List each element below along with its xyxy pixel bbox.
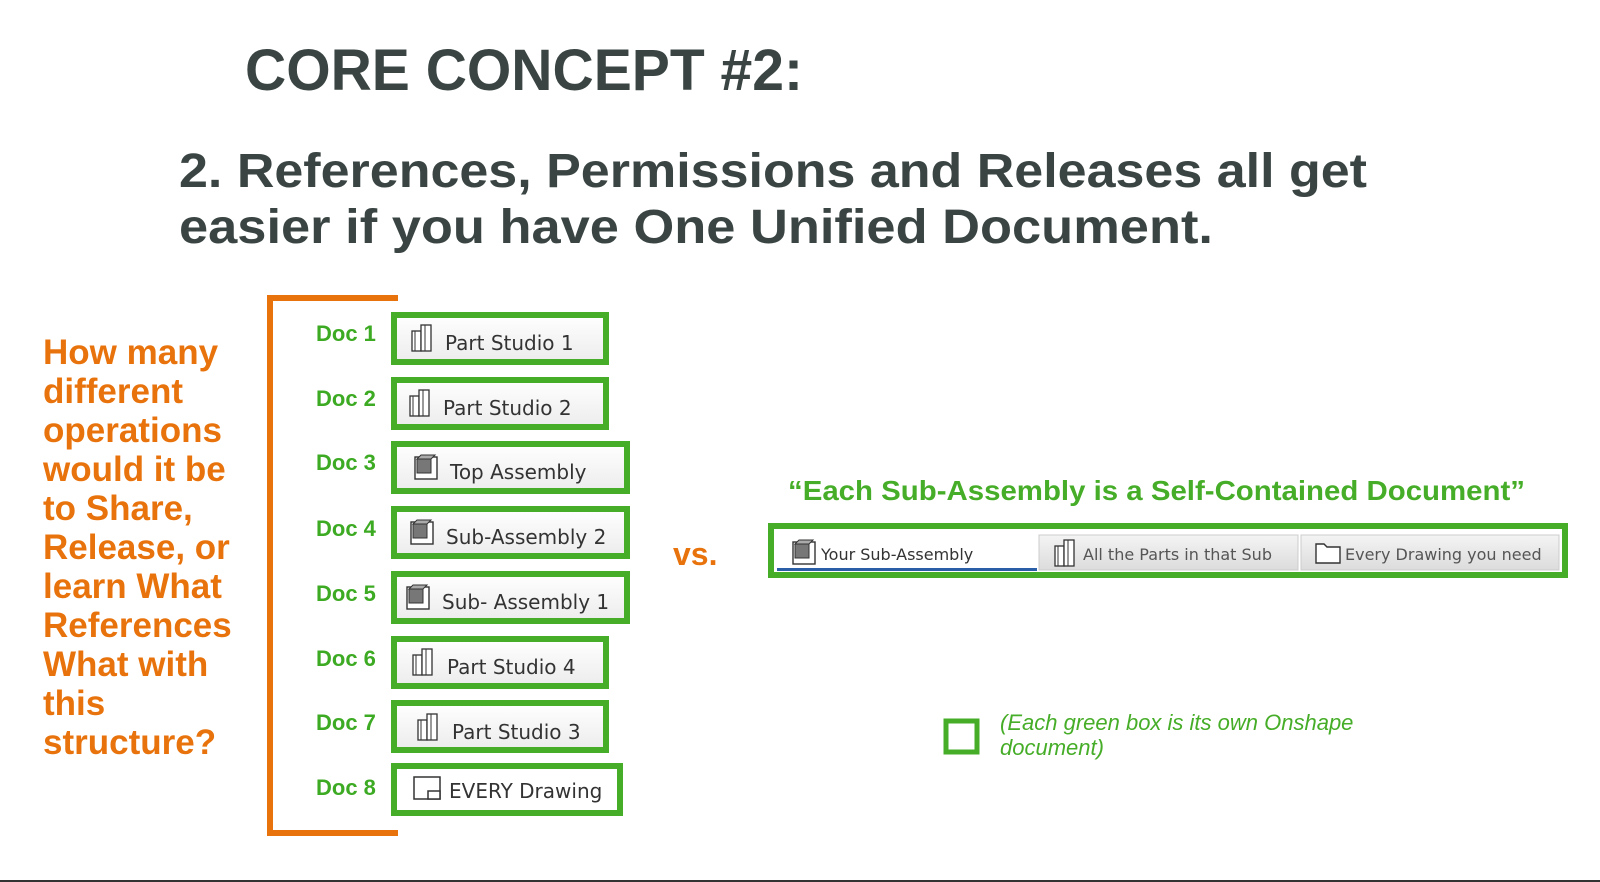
question text: to Share, [43, 489, 193, 528]
question text: structure? [43, 723, 216, 762]
legend: document) [1000, 735, 1104, 760]
doc 6 box: Part Studio 4 [447, 655, 576, 679]
doc labels: Doc 3 [316, 450, 376, 475]
title: CORE CONCEPT #2: [245, 38, 803, 103]
bracket [270, 298, 398, 833]
question text: What with [43, 645, 208, 684]
doc labels: Doc 8 [316, 775, 376, 800]
question text: How many [43, 333, 219, 372]
question text: different [43, 372, 183, 411]
doc 7 box: Part Studio 3 [452, 720, 581, 744]
doc 5 box: Sub- Assembly 1 [442, 590, 609, 614]
doc 5 box [394, 574, 627, 621]
subtitle: 2. References, Permissions and Releases all get [179, 145, 1367, 198]
vs label: vs. [673, 536, 717, 572]
question text: learn What [43, 567, 222, 606]
subtitle [179, 145, 1367, 254]
tab: drawings: Every Drawing you need [1345, 545, 1542, 564]
doc 8 box [394, 766, 620, 813]
doc 3 box [394, 444, 627, 491]
question text: would it be [42, 450, 226, 489]
question text: operations [43, 411, 222, 450]
tab: parts: All the Parts in that Sub [1083, 545, 1272, 564]
doc 8 box: EVERY Drawing [449, 779, 602, 803]
tab: your sub-assembly: Your Sub-Assembly [820, 545, 973, 564]
doc labels: Doc 5 [316, 581, 376, 606]
doc labels: Doc 4 [316, 516, 377, 541]
doc 6 box [394, 639, 606, 686]
tab: your sub-assembly [777, 535, 1037, 571]
document boxes [394, 315, 627, 813]
legend [946, 710, 1353, 760]
doc 2 box [394, 380, 606, 427]
quote heading: “Each Sub-Assembly is a Self-Contained Document” [788, 475, 1525, 506]
doc labels [316, 321, 377, 800]
doc 1 box: Part Studio 1 [445, 331, 574, 355]
doc 4 box: Sub-Assembly 2 [446, 525, 606, 549]
question text: this [43, 684, 105, 723]
doc labels: Doc 6 [316, 646, 376, 671]
doc 4 box [394, 509, 627, 556]
tab: drawings [1301, 535, 1559, 570]
subtitle: easier if you have One Unified Document. [179, 201, 1213, 254]
doc 7 box [394, 703, 606, 750]
tab: parts [1039, 535, 1298, 570]
question text: Release, or [43, 528, 230, 567]
doc 3 box: Top Assembly [449, 460, 587, 484]
doc 2 box: Part Studio 2 [443, 396, 572, 420]
legend: (Each green box is its own Onshape [1000, 710, 1353, 735]
doc labels: Doc 7 [316, 710, 376, 735]
question text: References [43, 606, 232, 645]
question text [42, 333, 232, 762]
doc labels: Doc 2 [316, 386, 376, 411]
doc labels: Doc 1 [316, 321, 376, 346]
unified document tab bar [771, 526, 1565, 575]
doc 1 box [394, 315, 606, 362]
